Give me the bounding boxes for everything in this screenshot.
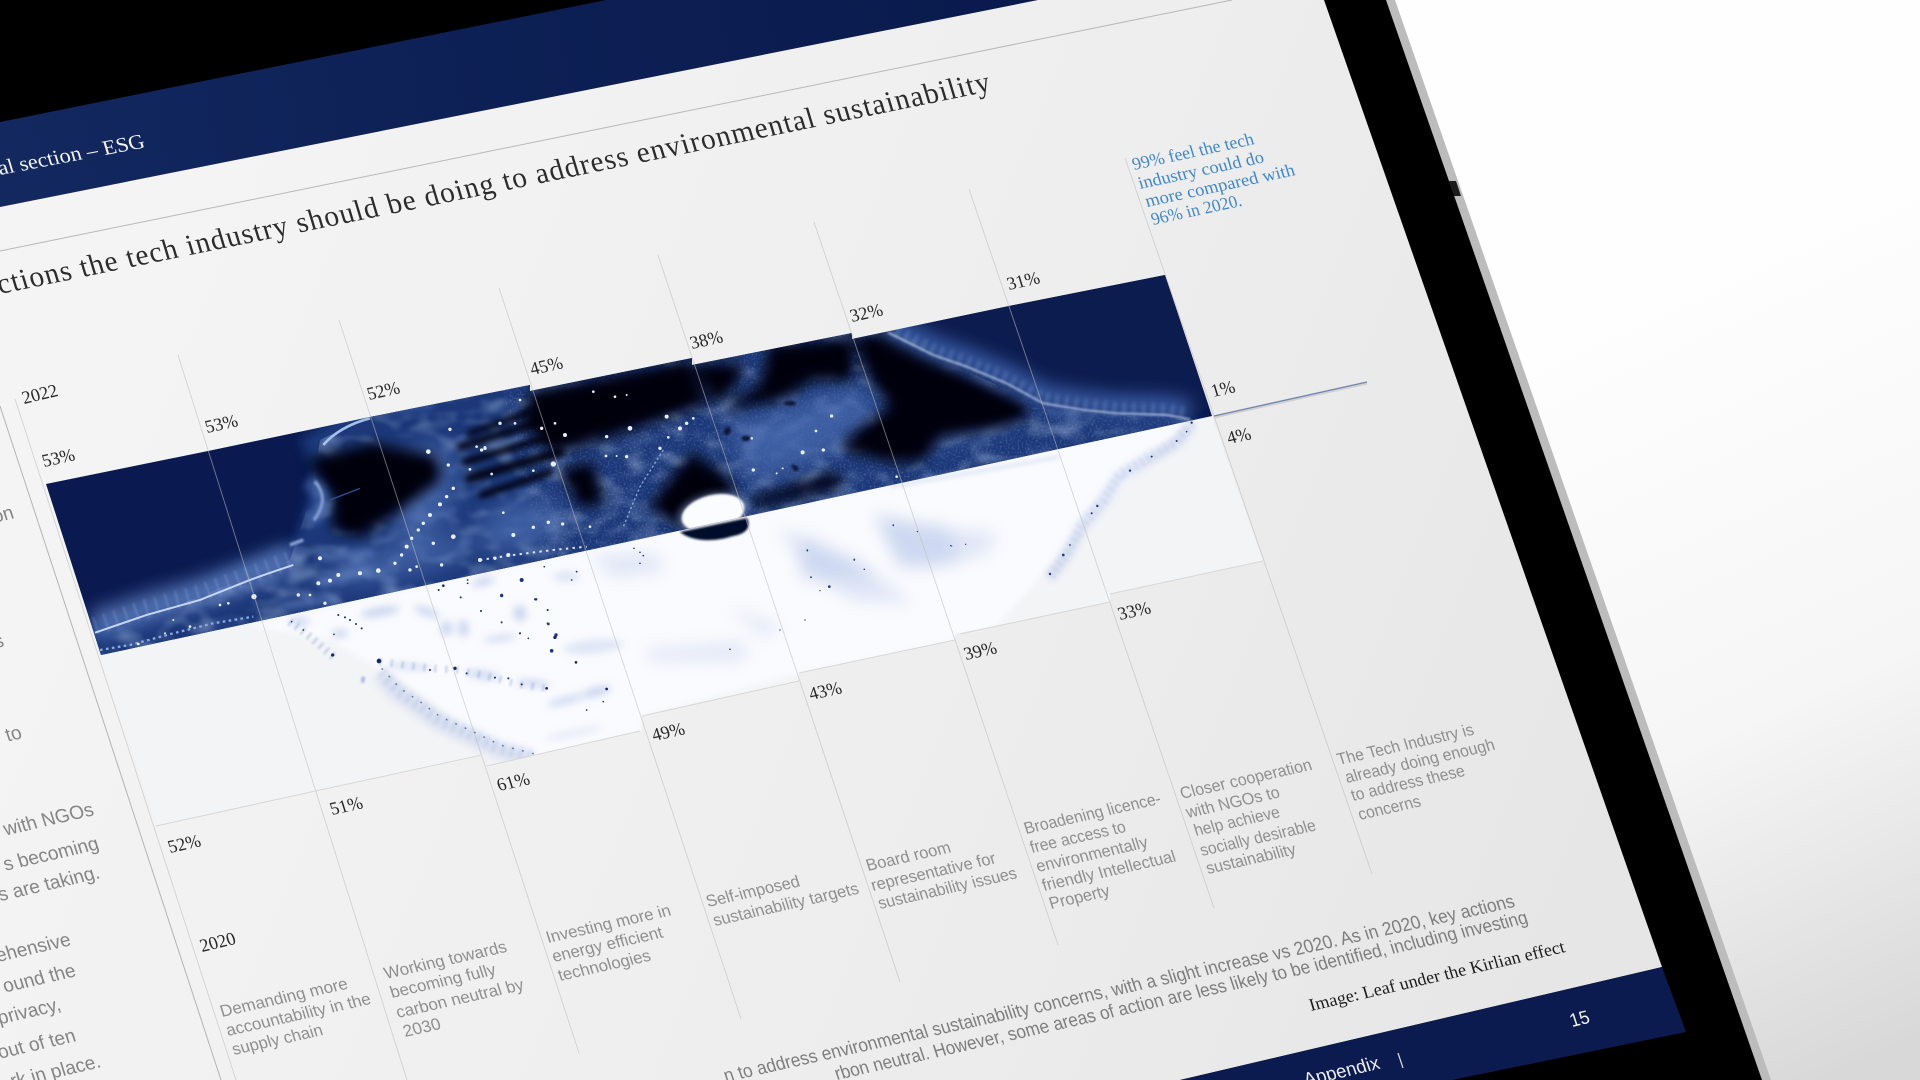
left body text: [0, 503, 104, 1080]
black stripes: [453, 406, 568, 502]
right leaf ridge: [800, 421, 1193, 580]
footer: page number: 15: [1567, 1006, 1592, 1031]
black crescent under the disc: [680, 518, 749, 540]
left ridge: [290, 622, 547, 759]
column label: licence-free IP: friendly Intellectual: [1039, 847, 1178, 895]
left body text: to: [3, 723, 25, 746]
chart image: lower light half (2020 values): [90, 400, 1280, 840]
2020 values: [165, 423, 1254, 956]
2022 values: [19, 267, 1237, 471]
column label: board room: [863, 838, 1019, 913]
header band: [0, 0, 1038, 207]
2022 values: 1%: [1208, 376, 1237, 401]
2020 values: 33%: [1115, 598, 1153, 624]
2022 values: 45%: [527, 352, 565, 379]
2022 values: 2022: [19, 380, 60, 408]
column label: licence-free IP: environmentally: [1033, 832, 1151, 876]
2020 values: 61%: [494, 769, 532, 795]
column label: licence-free IP: Broadening licence-: [1021, 789, 1163, 838]
2020 values: 39%: [961, 638, 999, 664]
bottom step lines of the chart: [156, 561, 1263, 826]
column label: already doing enough: The Tech Industry is: [1334, 720, 1476, 769]
bottom summary text: n to address environmental sustainability concerns, with a slight increase vs 2020. As in 2020, key actions: [721, 890, 1517, 1080]
leaf fine grain: [502, 330, 1190, 560]
column label: already doing enough: to address these: [1348, 761, 1467, 805]
column label: carbon neutral: carbon neutral by: [393, 975, 527, 1022]
left leaf patches and veins: [290, 566, 624, 759]
black shadow blobs: [307, 333, 1027, 537]
column label: NGOs: Closer cooperation: [1177, 755, 1314, 803]
column label: NGOs: [1177, 755, 1318, 878]
tablet side button: [1449, 181, 1461, 196]
column label: carbon neutral: [381, 937, 527, 1041]
leaf mottled texture: [90, 325, 1210, 665]
column label: licence-free IP: [1021, 789, 1178, 913]
callout: 99% note: 96% in 2020.: [1148, 190, 1244, 229]
bottom summary text: rbon neutral. However, some areas of action are less likely to be identified, including investing: [832, 907, 1530, 1080]
left column divider: [0, 406, 221, 1080]
2020 values: 2020: [197, 928, 238, 956]
column label: self-imposed targets: Self-imposed: [703, 872, 802, 911]
column label: energy efficient: energy efficient: [549, 923, 666, 966]
2022 values: 52%: [364, 377, 402, 404]
column label: self-imposed targets: sustainability targets: [710, 879, 861, 930]
column label: board room: representative for: [868, 849, 999, 895]
footer: separator: [1398, 1053, 1403, 1068]
column label: board room: Board room: [863, 838, 953, 875]
glowing veins centre and bright disc glow: [480, 390, 898, 560]
leaf interior fill: [90, 325, 1210, 665]
callout: 99% note: more compared with: [1142, 159, 1297, 211]
2020 values: 4%: [1224, 423, 1254, 448]
title: ctions the tech industry should be doing to address environmental sustainability: [0, 66, 994, 301]
2022 values: 38%: [687, 326, 725, 353]
column label: supply chain: Demanding more: [217, 974, 350, 1021]
left body text: s becoming: [1, 834, 102, 876]
1% bar: [1214, 382, 1367, 417]
2020 values: 49%: [649, 719, 687, 745]
2022 values: 31%: [1004, 267, 1042, 294]
2022 values: 32%: [847, 299, 885, 326]
callout: 99% note: [1129, 128, 1297, 229]
lower-left glow band: [89, 406, 562, 655]
column label: NGOs: sustainability: [1203, 839, 1299, 878]
column label: carbon neutral: Working towards: [381, 937, 509, 983]
2022 values: 53%: [202, 410, 240, 437]
2020 values: 52%: [165, 831, 203, 857]
column label: energy efficient: Investing more in: [543, 901, 673, 947]
dark navy leaf corner with top-right mask: [904, 275, 1210, 420]
left body text: with NGOs: [0, 800, 97, 841]
column label: supply chain: supply chain: [229, 1020, 325, 1059]
column label: NGOs: help achieve: [1191, 802, 1282, 840]
tablet silver edge: [1386, 0, 1771, 1080]
column label: energy efficient: technologies: [555, 946, 653, 985]
column label: carbon neutral: becoming fully: [387, 960, 499, 1002]
2020 values: 51%: [327, 793, 365, 819]
callout: 99% note: 99% feel the tech: [1129, 128, 1256, 174]
glowing veins left: [93, 403, 510, 650]
centre leaf patches: [500, 517, 960, 660]
2022 values: 53%: [39, 444, 77, 471]
column label: supply chain: [217, 974, 373, 1059]
bright mottled patches: [318, 385, 1021, 592]
2020 values: 43%: [806, 678, 844, 704]
column label: energy efficient: [543, 901, 673, 985]
callout: 99% note: industry could do: [1135, 147, 1266, 193]
chart image: upper dark half (2022 values): [46, 275, 1212, 655]
column label: NGOs: with NGOs to: [1182, 783, 1282, 822]
bright disc: [680, 492, 746, 529]
column label: NGOs: socially desirable: [1197, 816, 1318, 860]
image caption: Image: Leaf under the Kirlian effect: [1306, 936, 1567, 1015]
footer band: [1180, 967, 1686, 1080]
left body text: ound the: [0, 961, 79, 997]
column label: already doing enough: already doing enough: [1342, 735, 1497, 787]
header rule: [0, 0, 1232, 251]
column label: already doing enough: [1334, 720, 1497, 824]
column label: carbon neutral: 2030: [400, 1014, 443, 1041]
column label: licence-free IP: Property: [1046, 881, 1113, 913]
column label: already doing enough: concerns: [1355, 792, 1423, 824]
top ridge glow: [888, 325, 1190, 419]
column label: licence-free IP: free access to: [1027, 817, 1128, 857]
column label: board room: sustainability issues: [875, 863, 1019, 913]
column label: supply chain: accountability in the: [223, 989, 373, 1040]
column guide lines: [15, 158, 1372, 1080]
